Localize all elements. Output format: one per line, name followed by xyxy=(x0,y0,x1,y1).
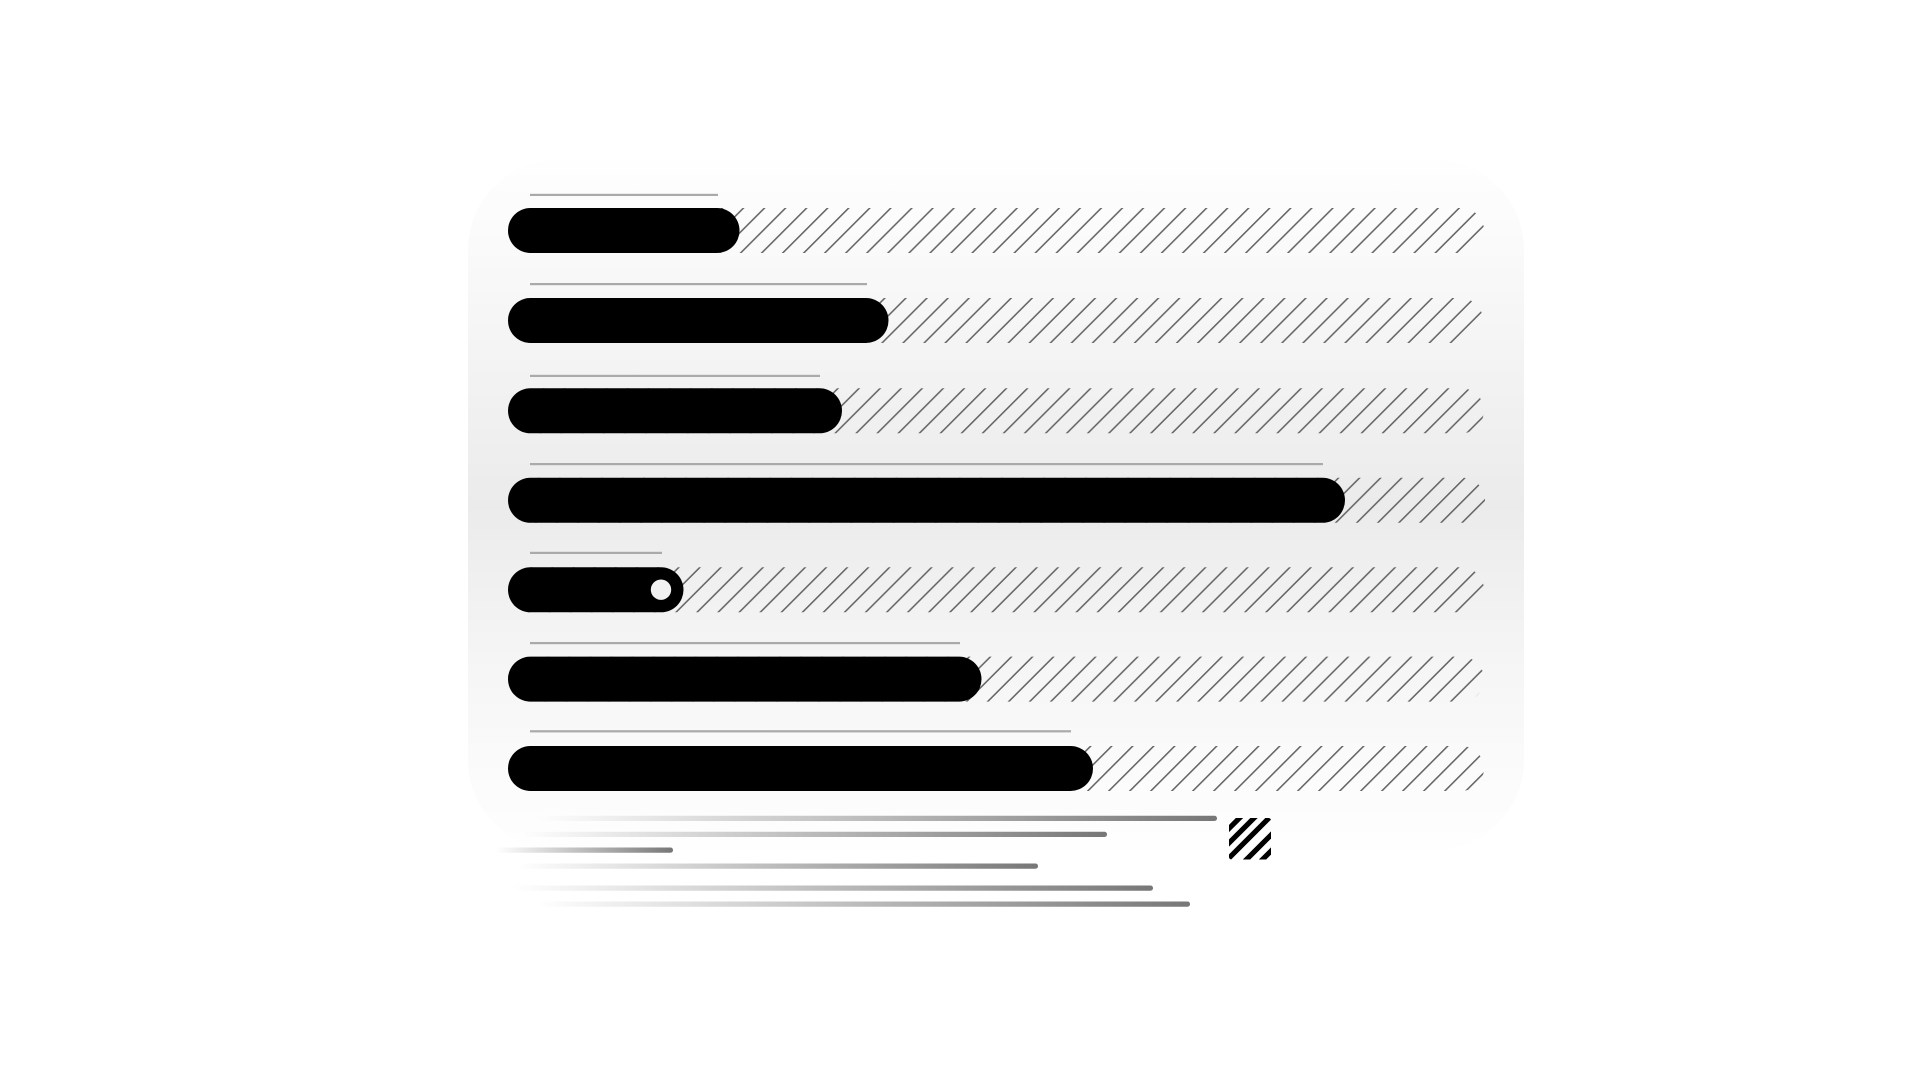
bar row 5 with marker xyxy=(508,552,1484,612)
bar row 4 xyxy=(508,463,1485,523)
icon: white dot marker xyxy=(651,580,671,600)
bar row 7 xyxy=(508,730,1484,791)
bar row 2 xyxy=(508,283,1483,343)
panel: chart background xyxy=(468,160,1524,850)
bar row 3 xyxy=(508,375,1484,433)
bar row 1 xyxy=(508,194,1484,253)
legend: fading lines xyxy=(496,816,1217,907)
bar row 6 xyxy=(508,642,1484,702)
icon: hatched square xyxy=(1229,818,1271,860)
